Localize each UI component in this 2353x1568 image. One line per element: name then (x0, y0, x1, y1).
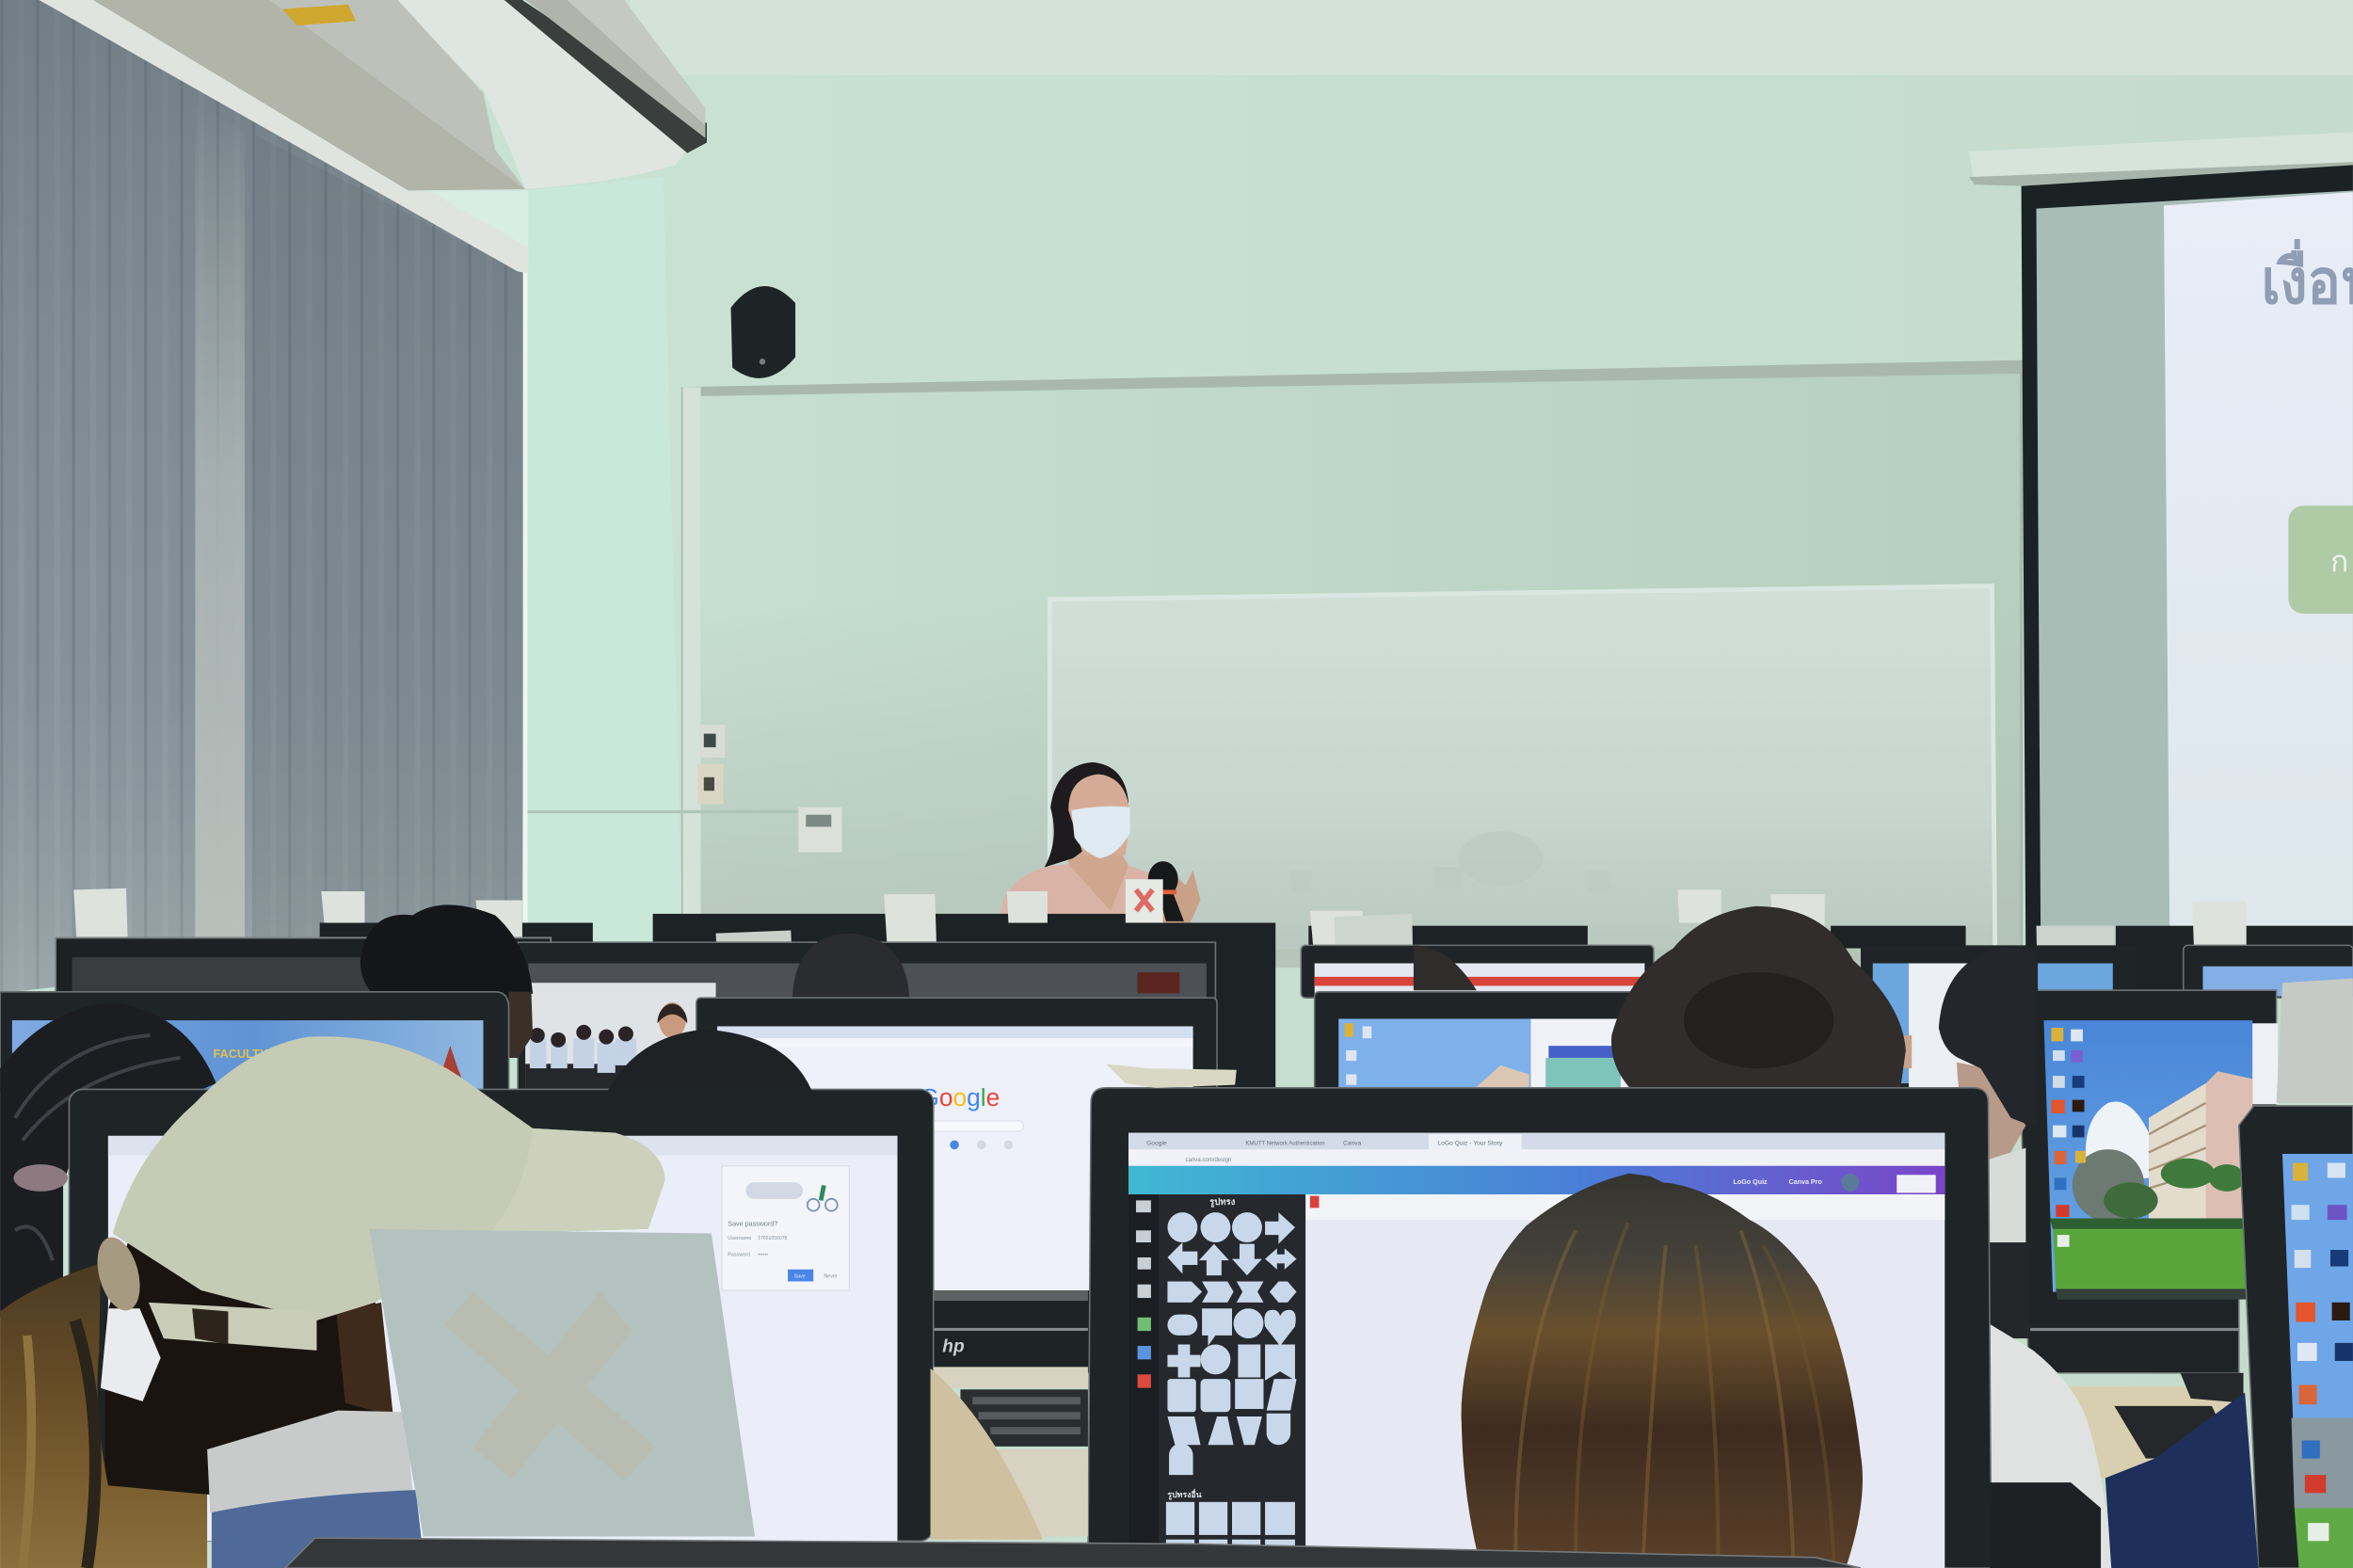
person: back head left (360, 904, 533, 1058)
denim shirt (212, 1490, 424, 1568)
fourth row monitors (69, 1088, 2353, 1568)
monitor: Google screen (696, 998, 1217, 1373)
person: front woman, brown hair (1462, 1174, 1863, 1568)
person: student on right (1939, 947, 2113, 1568)
vent slot (504, 0, 707, 153)
air conditioner (40, 0, 707, 273)
pillar: left wall corner (525, 177, 682, 960)
foreground monitor and chair (285, 1482, 2101, 1568)
second row monitors (56, 937, 2353, 1098)
person: left woman with dark hair (0, 1002, 216, 1318)
browser tabs (1128, 1133, 1945, 1166)
shirt (1984, 1320, 2113, 1568)
ceiling patch below unit (406, 190, 528, 264)
chair back (1981, 1242, 2030, 1338)
presenter mask (1071, 807, 1130, 858)
save password dialog: Password (728, 1252, 750, 1257)
keyboard (934, 1367, 1088, 1537)
paper tent cards (73, 888, 2247, 998)
trees (2073, 1149, 2245, 1222)
speaker (731, 286, 795, 378)
monitor: campus wallpaper (2018, 990, 2278, 1373)
monitor: faculty wallpaper (0, 992, 509, 1091)
browser tabs: Google (1146, 1140, 1167, 1146)
presenter neck (1068, 853, 1128, 911)
canva toolbar (1128, 1166, 1945, 1194)
person: front woman with cap (0, 1036, 664, 1568)
person: back head middle (792, 934, 909, 998)
face mask (101, 1308, 161, 1401)
taskbar (2056, 1288, 2252, 1300)
canva side panel: รูปทรงอื่น (1167, 1488, 1202, 1500)
presenter face (1068, 775, 1130, 856)
cap strap (149, 1303, 316, 1351)
third row monitors (0, 990, 2278, 1373)
monitor: faculty wallpaper: FACULTY OF (213, 1047, 288, 1061)
face (1957, 1063, 2025, 1163)
save password dialog: Never (824, 1274, 838, 1280)
sleeve: beige shirt (931, 1368, 1043, 1540)
monitor: password dialog (69, 1089, 934, 1541)
hair (1939, 947, 2038, 1128)
presenter body (1000, 864, 1186, 920)
monitor: desktop icons right (2239, 1106, 2353, 1568)
monitor: far left (56, 937, 551, 1005)
person: navy jacket student (2105, 1392, 2258, 1568)
canva toolbar: LoGo Quiz (1733, 1178, 1768, 1186)
save password dialog: Save password? (728, 1221, 777, 1228)
browser tabs: Canva (1343, 1140, 1362, 1146)
person: curly hair student (1611, 906, 1906, 1094)
canva toolbar: Canva Pro (1788, 1178, 1822, 1186)
cloud (2086, 1101, 2149, 1185)
slide button: ก (2330, 544, 2348, 578)
monitor: right (1861, 945, 2136, 1098)
monitor: centre right (1301, 945, 1654, 998)
canva side panel (1128, 1194, 1305, 1568)
students in photo (525, 1025, 705, 1089)
face mask (507, 992, 533, 1058)
louvre grille (93, 0, 525, 190)
ponytail (0, 1263, 207, 1568)
sticker (282, 5, 356, 25)
presenter hair (1045, 762, 1128, 867)
window edge (2252, 1023, 2278, 1104)
monitor: far right (2184, 945, 2353, 998)
presenter (1000, 762, 1201, 922)
wall: lower wall panel (681, 360, 2023, 968)
microphone (1148, 861, 1184, 921)
dark hair (105, 1238, 393, 1495)
hair scrunchie (90, 1233, 147, 1315)
underside (270, 0, 525, 189)
curtain (0, 0, 525, 993)
wall fixtures: switches and outlet (525, 725, 841, 853)
crumpled paper on monitor (1106, 1064, 1237, 1088)
cap (113, 1036, 664, 1320)
flap (568, 0, 705, 126)
paper card with X (369, 1229, 755, 1537)
desk and keyboard right (2068, 1373, 2244, 1478)
curtain rail (40, 0, 528, 273)
save password dialog: 17651050078 (758, 1236, 788, 1241)
monitor: centre wallpaper with login window (1315, 992, 1652, 1096)
save password dialog: Save (793, 1274, 806, 1280)
hp logo: hp (942, 1336, 965, 1356)
browser tabs: canva.com/design (1186, 1158, 1231, 1163)
browser tabs: KMUTT Network Authentication (1245, 1141, 1325, 1146)
save password dialog (722, 1166, 849, 1290)
shape palette (1166, 1212, 1297, 1568)
building (2149, 1071, 2252, 1222)
card on monitor top right (2277, 978, 2353, 1103)
whiteboard (1048, 584, 1997, 949)
google wordmark: Google (920, 1083, 1000, 1112)
monitor: Canva editor (1088, 1088, 1992, 1568)
projector screen (1969, 132, 2353, 960)
shirt collar (1979, 1148, 2025, 1242)
front casing (393, 0, 687, 189)
desktop icons (2051, 1028, 2086, 1247)
hoodie collar (207, 1411, 414, 1512)
slide button (2288, 505, 2353, 614)
back row monitors (320, 914, 2353, 1088)
red cross card (1126, 879, 1163, 922)
monitor: group photo screen (518, 942, 1215, 1093)
save password dialog: Username (728, 1236, 751, 1241)
temple (437, 1046, 464, 1083)
hair tie (13, 1164, 68, 1192)
person: centre head in front of Google screen (608, 1030, 812, 1091)
browser tabs: LoGo Quiz - Your Story (1437, 1140, 1503, 1146)
person: back head right (1414, 945, 1477, 990)
save password dialog: •••••• (758, 1252, 768, 1257)
hand holding microphone (1163, 871, 1201, 922)
canva side panel: รูปทรง (1209, 1196, 1236, 1208)
